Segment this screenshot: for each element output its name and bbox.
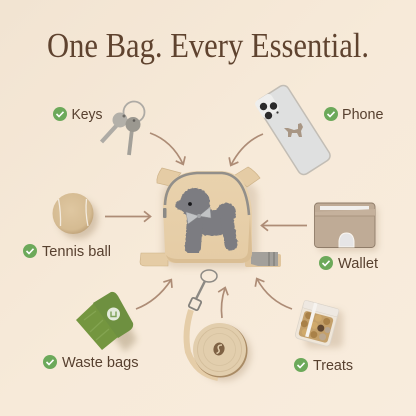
- arrow: waste bags: [136, 280, 171, 309]
- arrow: wallet: [262, 224, 307, 226]
- label: Keys: Keys: [72, 107, 102, 123]
- clip: [188, 270, 217, 311]
- icon: treats jar: [294, 300, 343, 348]
- leash strap: [187, 310, 218, 378]
- dog patch: [175, 188, 236, 247]
- top straps: [157, 167, 260, 187]
- arrow: treats: [257, 279, 292, 309]
- label: Wallet: Wallet: [338, 256, 378, 272]
- camera module: [254, 92, 280, 120]
- coil: [194, 324, 248, 378]
- icon: tennis ball: [52, 193, 98, 239]
- label: Tennis ball: Tennis ball: [42, 244, 111, 260]
- arrows pointing to the bag: [105, 133, 307, 318]
- roll: [93, 292, 133, 338]
- logo: [212, 341, 226, 357]
- icon: leash: [187, 270, 251, 381]
- label: Phone: [324, 107, 384, 123]
- check icon: [43, 355, 57, 369]
- label: Keys: [53, 107, 102, 123]
- check icon: [294, 358, 308, 372]
- bow: [186, 207, 211, 224]
- label: Phone: Phone: [342, 107, 384, 123]
- check icon: [53, 107, 67, 121]
- treats inside: [298, 310, 334, 343]
- label: Waste bags: Waste bags: [62, 355, 138, 371]
- label: Treats: Treats: [313, 358, 353, 374]
- title: One Bag. Every Essential.: [47, 27, 369, 65]
- check icon: [23, 244, 37, 258]
- check icon: [324, 107, 338, 121]
- arrow: keys: [150, 133, 183, 164]
- arrow: leash: [221, 288, 225, 318]
- bottom strap and buckle: [140, 252, 281, 267]
- bag shadow: [162, 182, 258, 268]
- check icon: [319, 256, 333, 270]
- label: Wallet: [319, 256, 378, 272]
- sheet: [76, 303, 118, 350]
- bag body: [163, 171, 252, 263]
- icon: wallet: [314, 203, 378, 251]
- dog logo: [284, 123, 303, 137]
- icon: keys: [102, 102, 144, 155]
- icon: phone: [254, 83, 332, 177]
- central backpack harness: [140, 167, 281, 268]
- zipper: [165, 173, 249, 215]
- arrow: phone: [231, 134, 263, 165]
- icon: waste bags: [76, 292, 137, 352]
- phone case: [255, 83, 332, 177]
- label: Treats: [294, 358, 353, 374]
- arrow: tennis ball: [105, 216, 150, 218]
